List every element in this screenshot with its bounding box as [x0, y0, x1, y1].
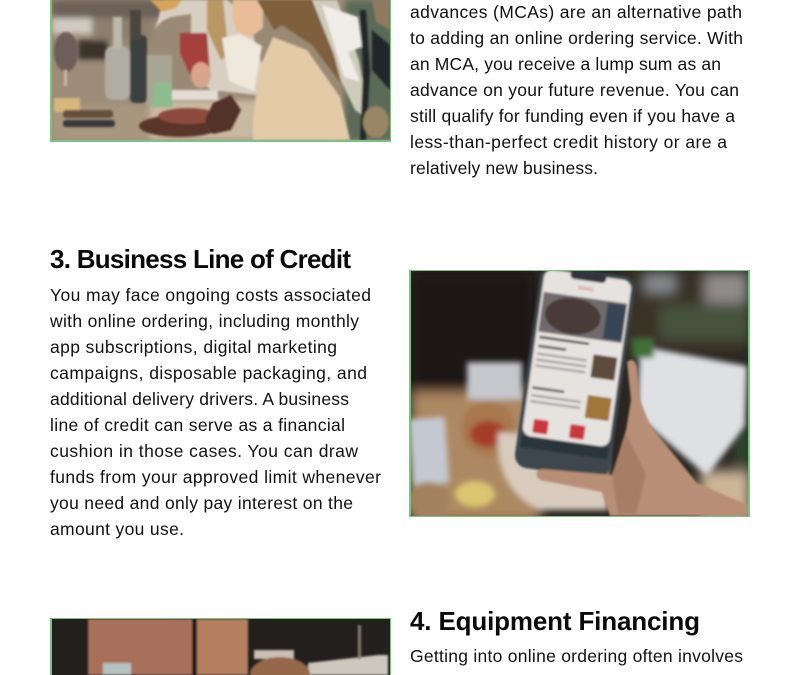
left person	[155, 0, 262, 95]
text block: business line of credit paragraph: funds from your approved limit whenever	[50, 467, 381, 487]
text block: merchant cash advance paragraph	[410, 2, 743, 178]
text block: business line of credit paragraph: additional delivery drivers. A business	[50, 389, 349, 409]
photo: hand holding a phone with a food ordering app: Bakery	[578, 285, 595, 293]
black stand	[360, 10, 370, 140]
text block: merchant cash advance paragraph: relatively new business.	[410, 158, 598, 178]
text block: business line of credit paragraph: campaigns, disposable packaging, and	[50, 363, 367, 383]
text block: business line of credit paragraph	[49, 285, 381, 539]
text block: merchant cash advance paragraph: advance on your future revenue. You can	[410, 80, 739, 100]
text block: merchant cash advance paragraph: still qualify for funding even if you have a	[410, 106, 735, 126]
text block: business line of credit paragraph: you need and only pay interest on the	[50, 493, 353, 513]
text block: merchant cash advance paragraph: to adding an online ordering service. With	[410, 28, 743, 48]
text block: merchant cash advance paragraph: less-than-perfect credit history or are a	[410, 132, 727, 152]
text block: business line of credit paragraph: You may face ongoing costs associated	[50, 285, 371, 305]
bottles	[105, 46, 130, 100]
text block: merchant cash advance paragraph: an MCA, you receive a lump sum as an	[410, 54, 721, 74]
wine glass	[54, 32, 78, 72]
right person blouse	[253, 37, 350, 140]
text block: business line of credit paragraph: with online ordering, including monthly	[49, 311, 359, 331]
heading: 4. Equipment Financing: 4. Equipment Financing	[410, 606, 700, 636]
text block: business line of credit paragraph: amount you use.	[50, 519, 184, 539]
heading: 3. Business Line of Credit: 3. Business Line of Credit	[50, 244, 351, 274]
text block: business line of credit paragraph: line of credit can serve as a financial	[50, 415, 345, 435]
text block: business line of credit paragraph: cushion in those cases. You can draw	[50, 441, 358, 461]
photo: friends dining at a restaurant table	[50, 0, 395, 142]
text block: equipment financing paragraph: Getting into online ordering often involves	[410, 646, 743, 666]
text block: business line of credit paragraph: app subscriptions, digital marketing	[50, 337, 337, 357]
photo: restaurant interior with brick wall	[50, 618, 391, 675]
hand	[536, 360, 748, 516]
phone	[513, 264, 637, 480]
hair and shawl of right person	[310, 0, 364, 116]
photo: hand holding a phone with a food ordering app	[408, 264, 750, 522]
white sleeves	[322, 5, 362, 82]
text block: merchant cash advance paragraph: advances (MCAs) are an alternative path	[410, 2, 742, 22]
table items	[54, 98, 80, 112]
